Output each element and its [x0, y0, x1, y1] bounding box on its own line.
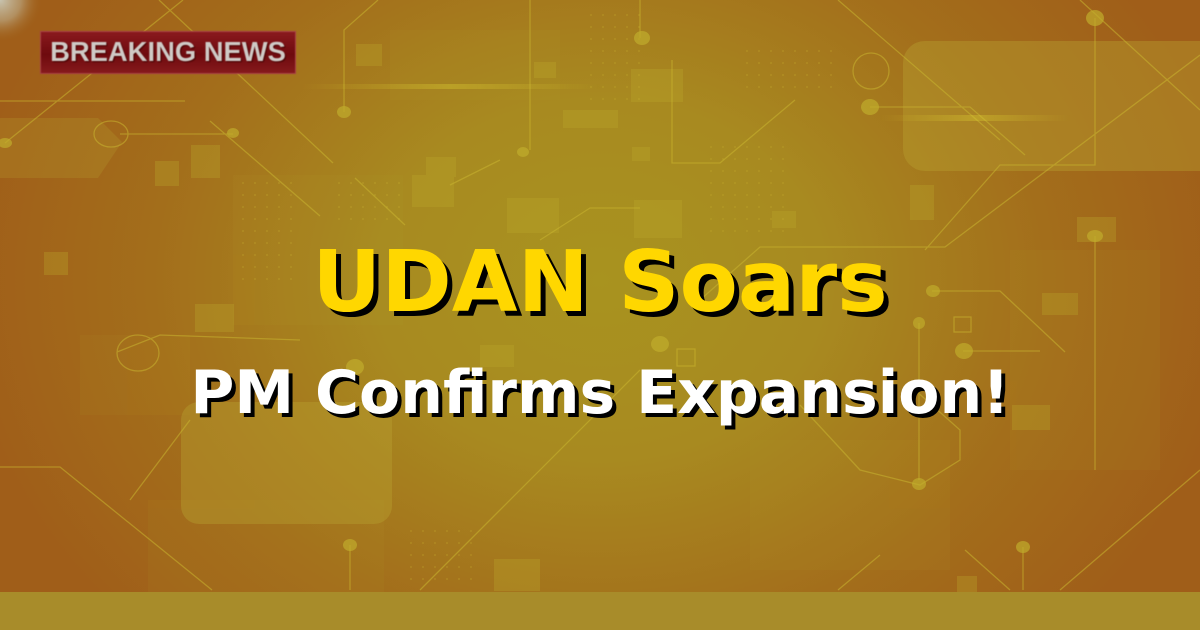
light streaks	[300, 84, 1070, 121]
badge: breaking news	[40, 31, 296, 74]
badge: breaking news: BREAKING NEWS	[50, 36, 286, 67]
large rounded panels	[0, 41, 1200, 524]
subtitle: PM Confirms Expansion!	[190, 358, 1010, 428]
bottom band	[0, 592, 1200, 630]
dot grids	[240, 10, 835, 590]
title: UDAN Soars	[312, 233, 888, 332]
small chips	[44, 44, 1116, 592]
circuit nodes	[0, 10, 1104, 553]
